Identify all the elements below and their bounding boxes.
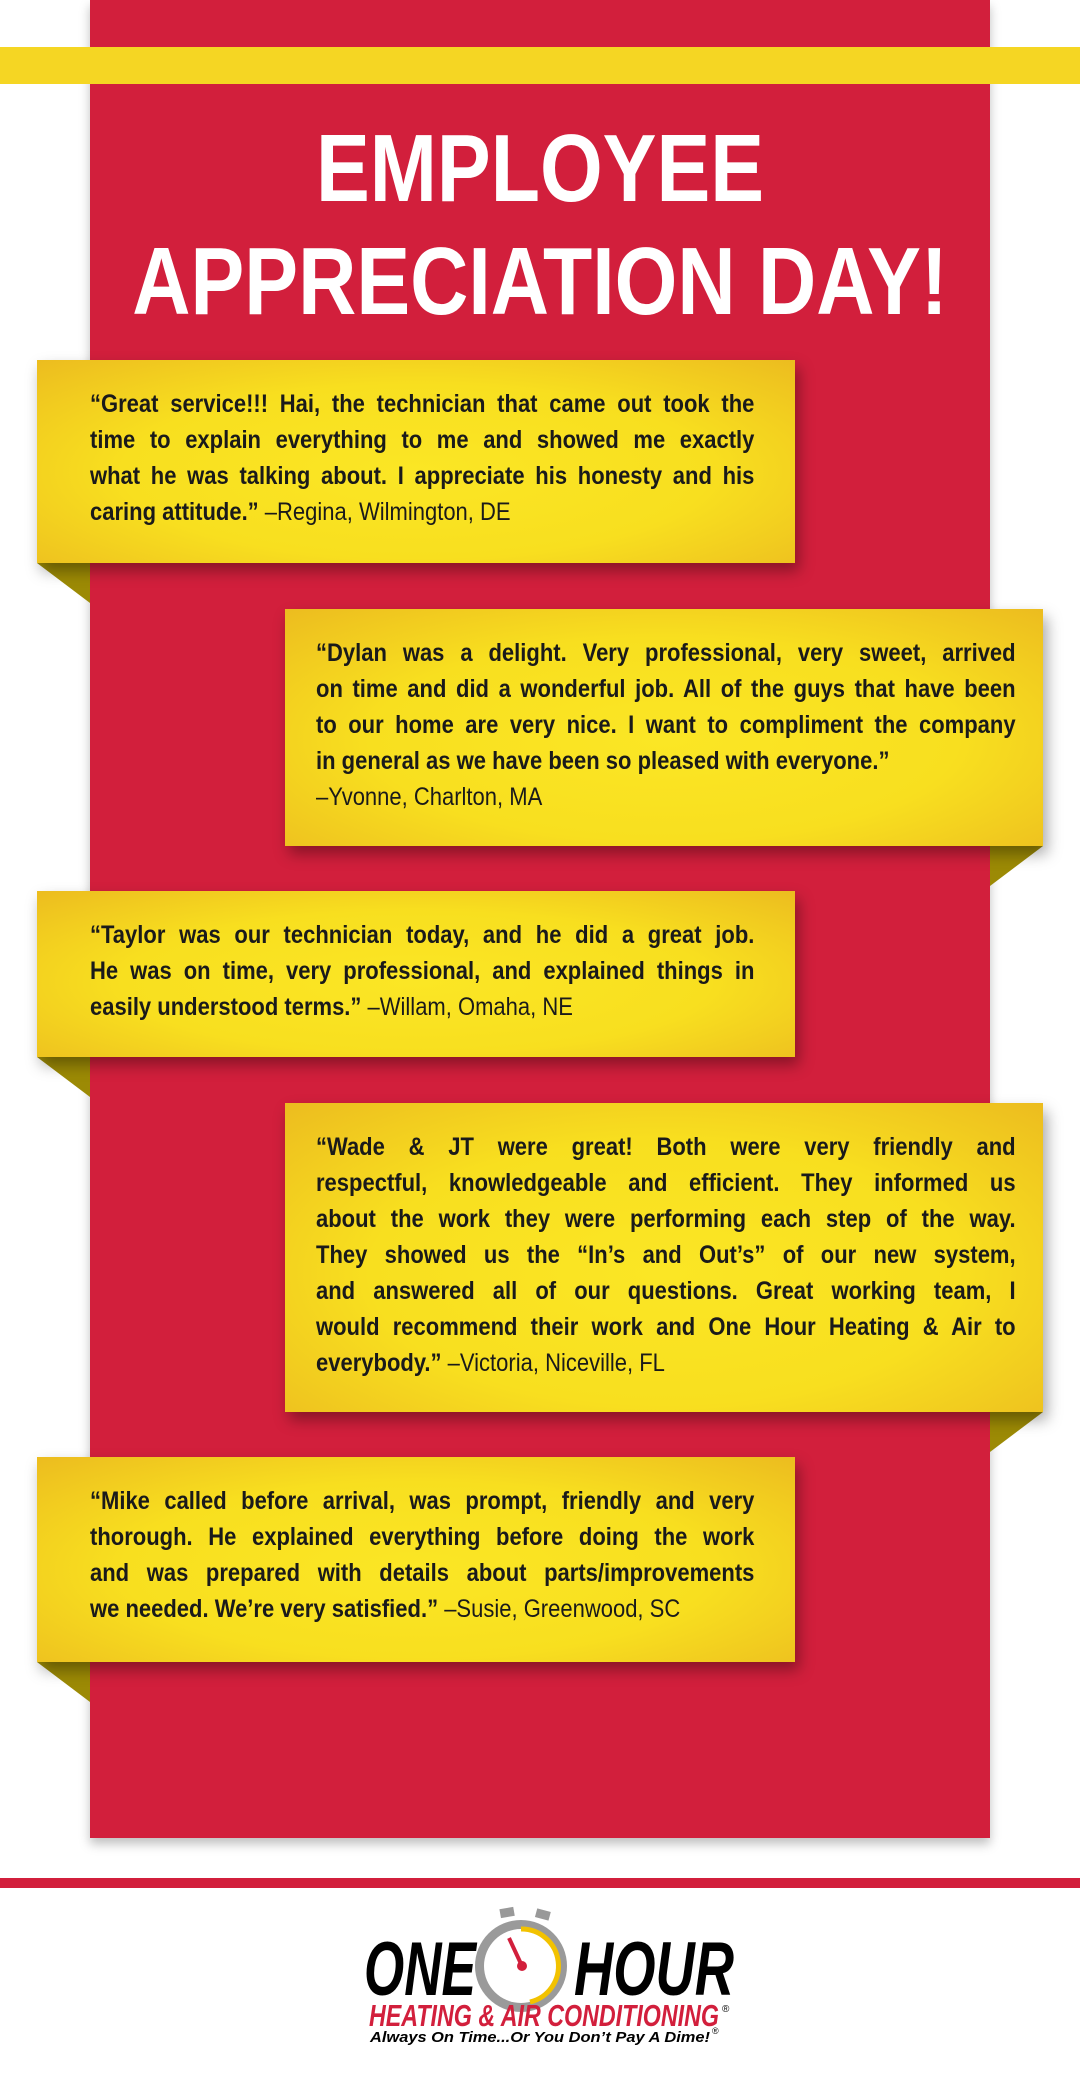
quote 2: to our home are very nice. I want to compliment the company	[316, 711, 1016, 739]
icon: stopwatch	[475, 1907, 567, 2012]
quote 4: respectful, knowledgeable and efficient. They informed us	[316, 1169, 1016, 1197]
quote 4: about the work they were performing each step of the way.	[316, 1205, 1016, 1233]
quote 4: and answered all of our questions. Great working team, I	[316, 1277, 1016, 1305]
logo: ®	[712, 2026, 719, 2036]
bottom red line	[0, 1878, 1080, 1888]
quote 5	[37, 1457, 795, 1662]
title: EMPLOYEE	[316, 115, 764, 222]
logo: ®	[722, 2004, 730, 2015]
quote 3	[37, 891, 795, 1057]
quote 1	[37, 360, 795, 563]
quote 2: on time and did a wonderful job. All of the guys that have been	[316, 675, 1016, 703]
quote 4: everybody.” –Victoria, Niceville, FL	[316, 1349, 665, 1377]
quote 3: easily understood terms.” –Willam, Omaha, NE	[90, 993, 573, 1021]
quote 5: “Mike called before arrival, was prompt, friendly and very	[90, 1487, 754, 1515]
red panel	[90, 0, 990, 1838]
fold: quote 1	[37, 563, 90, 603]
title: APPRECIATION DAY!	[132, 228, 948, 335]
quote 1: time to explain everything to me and showed me exactly	[90, 426, 754, 454]
yellow top bar	[0, 47, 1080, 84]
quote 1: what he was talking about. I appreciate his honesty and his	[90, 462, 754, 490]
quote 4: “Wade & JT were great! Both were very friendly and	[316, 1133, 1016, 1161]
quote 2: –Yvonne, Charlton, MA	[316, 783, 542, 811]
fold: quote 4	[990, 1412, 1043, 1452]
logo text: ONE HOUR: ONE	[364, 1927, 478, 2012]
quote 5: we needed. We’re very satisfied.” –Susie, Greenwood, SC	[90, 1595, 680, 1623]
quote 4	[285, 1103, 1043, 1412]
fold: quote 5	[37, 1662, 90, 1702]
quote 3: He was on time, very professional, and explained things in	[90, 957, 754, 985]
title	[132, 115, 948, 335]
quote 5: thorough. He explained everything before doing the work	[90, 1523, 754, 1551]
logo text: tagline: Always On Time...Or You Don’t Pay A Dime!	[369, 2029, 710, 2046]
quote 2: in general as we have been so pleased with everyone.”	[316, 747, 889, 775]
quote 4: They showed us the “In’s and Out’s” of our new system,	[316, 1241, 1016, 1269]
quote 3: “Taylor was our technician today, and he did a great job.	[90, 921, 754, 949]
quote 4: would recommend their work and One Hour Heating & Air to	[316, 1313, 1016, 1341]
quote 2	[285, 609, 1043, 846]
quote 5: and was prepared with details about parts/improvements	[90, 1559, 754, 1587]
fold: quote 2	[990, 846, 1043, 886]
quote 2: “Dylan was a delight. Very professional, very sweet, arrived	[316, 639, 1016, 667]
fold: quote 3	[37, 1057, 90, 1097]
logo	[364, 1906, 734, 2046]
quote 1: “Great service!!! Hai, the technician that came out took the	[90, 390, 754, 418]
quote 1: caring attitude.” –Regina, Wilmington, DE	[90, 498, 511, 526]
